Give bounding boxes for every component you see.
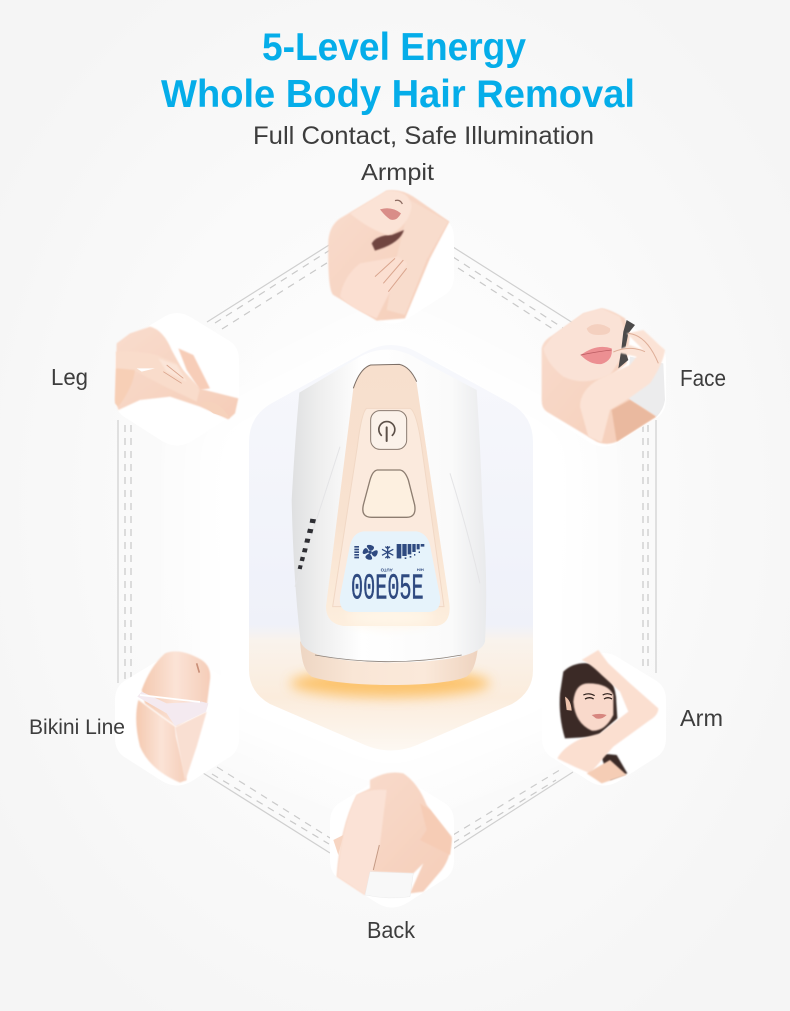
photo: back [330, 772, 454, 908]
label: bikini line: Bikini Line [29, 716, 125, 739]
panel top edge [353, 364, 417, 388]
digits: 00E05E [351, 569, 424, 610]
device base [300, 642, 478, 685]
label: arm: Arm [680, 705, 723, 731]
body seam [315, 655, 462, 662]
title [161, 26, 635, 116]
label: face: Face [680, 365, 726, 391]
photo: face [542, 308, 666, 446]
hexagon backdrop [249, 345, 533, 750]
center device panel [192, 320, 590, 800]
battery icon [354, 546, 359, 558]
label: back: Back [367, 917, 415, 943]
photo: armpit [328, 190, 454, 324]
device body [292, 350, 486, 663]
label: armpit: Armpit [361, 159, 435, 185]
fan icon [363, 545, 378, 560]
hexagon connector lines [118, 245, 656, 853]
LCD screen [340, 531, 440, 627]
photo: leg [115, 313, 239, 446]
body crease lines [295, 447, 480, 587]
title: 5-Level Energy [262, 26, 526, 69]
device illustration [290, 350, 490, 697]
body part labels [29, 159, 726, 943]
level bars [397, 544, 424, 558]
panel inset [333, 408, 444, 607]
AUTO label: AUTO [380, 567, 393, 572]
snowflake icon [382, 546, 393, 559]
photo: arm [542, 650, 666, 786]
panel glow [192, 320, 590, 800]
subtitle: Full Contact, Safe Illumination [253, 122, 594, 150]
power button [371, 411, 407, 449]
photo: bikini line [115, 651, 239, 786]
orange light glow [290, 669, 490, 697]
vent slots [298, 519, 316, 569]
hour label: H/H [417, 567, 424, 572]
peach front panel [326, 364, 450, 626]
trigger button [363, 470, 415, 517]
white hexagon [330, 191, 454, 324]
label: leg: Leg [51, 364, 88, 390]
title: Whole Body Hair Removal [161, 73, 635, 116]
